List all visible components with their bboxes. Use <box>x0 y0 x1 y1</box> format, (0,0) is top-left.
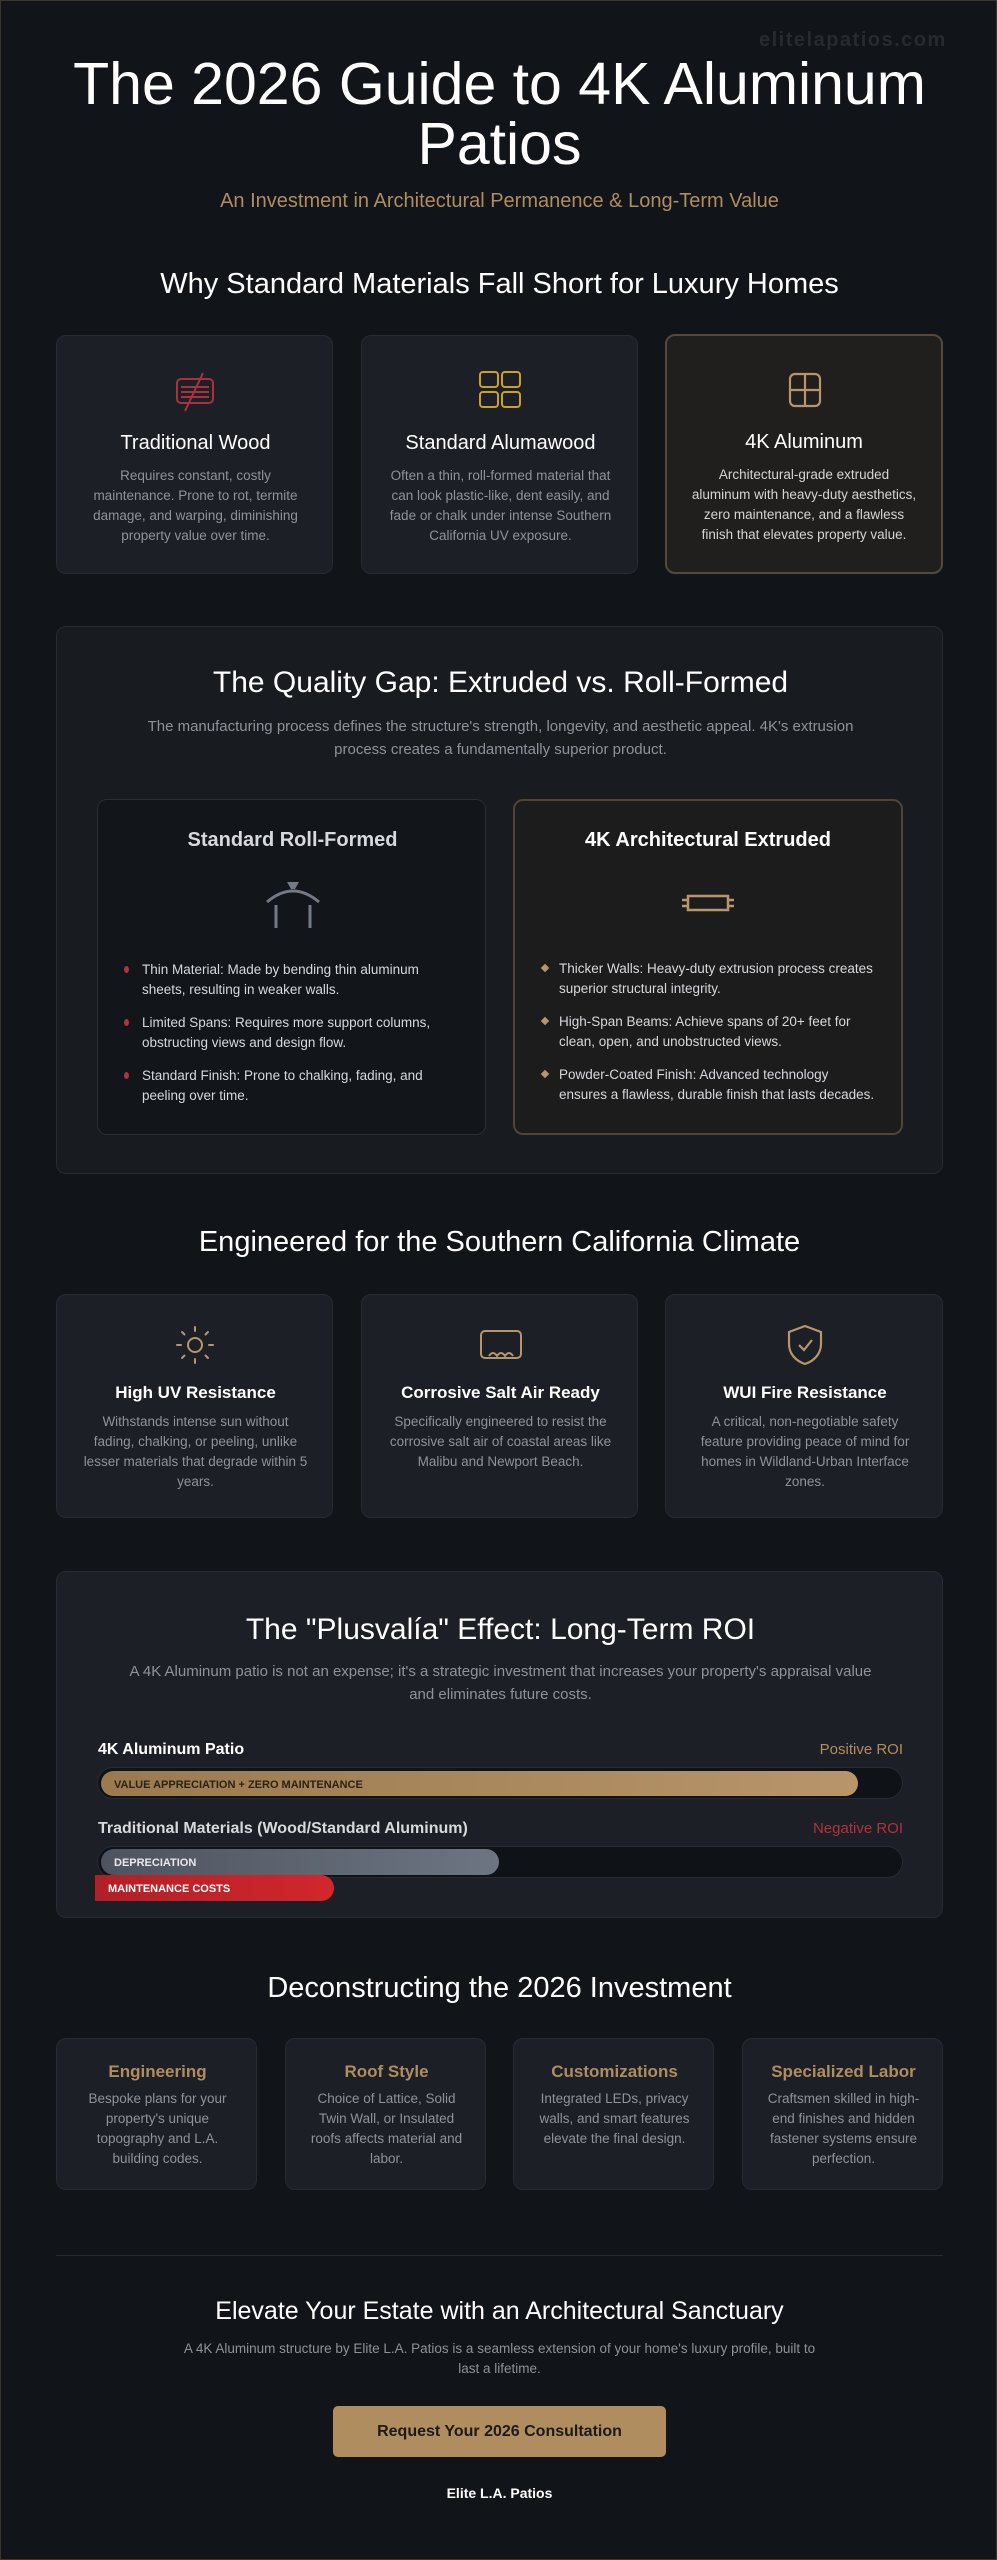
panel: 4K aluminum <box>665 334 943 574</box>
icon: sun <box>176 1326 214 1364</box>
panel: standard alumawood <box>361 335 638 574</box>
title: The 2026 Guide to 4K Aluminum <box>73 51 926 117</box>
subpanel title: Standard Roll-Formed <box>187 829 398 851</box>
watermark: elitelapatios.com <box>759 29 947 51</box>
title <box>73 51 926 177</box>
bullet list <box>124 962 430 1103</box>
card title: 4K Aluminum <box>745 431 863 453</box>
text: Integrated LEDs, privacy walls, and smart features elevate the final design. <box>539 2091 690 2146</box>
panel: fire <box>665 1294 943 1518</box>
label: 4K Aluminum Patio <box>98 1741 244 1758</box>
tag: Negative ROI <box>813 1820 903 1837</box>
text: Craftsmen skilled in high-end finishes and hidden fastener systems ensure perfection. <box>768 2091 919 2166</box>
icon: extruded beam <box>682 894 734 912</box>
card text: Withstands intense sun without fading, chalking, or peeling, unlike lesser materials that degrade within 5 years. <box>84 1414 307 1489</box>
bar row: 4K <box>97 1741 903 1799</box>
intro text: A 4K Aluminum patio is not an expense; it's a strategic investment that increases your property's appraisal value and eliminates future costs. <box>130 1663 871 1703</box>
card text: Architectural-grade extruded aluminum with heavy-duty aesthetics, zero maintenance, and a flawless finish that elevates property value. <box>692 467 916 542</box>
card title: High UV Resistance <box>115 1383 276 1402</box>
text: Bespoke plans for your property's unique topography and L.A. building codes. <box>88 2091 227 2166</box>
CTA text: A 4K Aluminum structure by Elite L.A. Patios is a seamless extension of your home's luxury profile, built to last a lifetime. <box>184 2341 815 2376</box>
bullet list: Powder-Coated Finish: Advanced technology ensures a flawless, durable finish that lasts decades. <box>559 1067 874 1102</box>
icon: roll-formed <box>266 882 320 928</box>
panel: salt air <box>361 1294 638 1518</box>
heading: why standard materials: Why Standard Materials Fall Short for Luxury Homes <box>160 268 839 300</box>
tag: Positive ROI <box>820 1741 903 1758</box>
icon: grid <box>479 371 521 408</box>
heading: investment: Deconstructing the 2026 Investment <box>267 1972 732 2004</box>
heading: The "Plusvalía" Effect: Long-Term ROI <box>246 1613 755 1646</box>
card title: Traditional Wood <box>120 432 271 454</box>
title: Customizations <box>551 2062 678 2081</box>
icon: window <box>788 372 822 408</box>
subpanel: roll-formed <box>97 799 486 1135</box>
maintenance bar <box>95 1875 334 1901</box>
CTA button: Request Your 2026 Consultation <box>377 2423 622 2440</box>
panel: traditional wood <box>56 335 333 574</box>
panel: roof style <box>285 2038 486 2190</box>
bar <box>97 1767 903 1799</box>
CTA heading: Elevate Your Estate with an Architectural Sanctuary <box>215 2297 784 2325</box>
subpanel: extruded <box>513 799 903 1135</box>
CTA button <box>333 2406 666 2457</box>
bar: DEPRECIATION <box>114 1857 196 1869</box>
card text: Specifically engineered to resist the corrosive salt air of coastal areas like Malibu and Newport Beach. <box>390 1414 611 1469</box>
title: Patios <box>418 111 581 177</box>
heading: climate: Engineered for the Southern California Climate <box>199 1226 800 1258</box>
panel: specialized labor <box>742 2038 943 2190</box>
bullet list <box>540 961 874 1102</box>
bar: VALUE APPRECIATION + ZERO MAINTENANCE <box>114 1779 363 1791</box>
title: Roof Style <box>344 2062 429 2081</box>
subtitle: An Investment in Architectural Permanence & Long-Term Value <box>220 190 779 212</box>
panel: ROI <box>56 1571 943 1918</box>
bullet list: Standard Finish: Prone to chalking, fading, and peeling over time. <box>142 1068 423 1103</box>
icon: shield <box>788 1324 822 1366</box>
label: Traditional Materials (Wood/Standard Aluminum) <box>98 1820 468 1837</box>
heading: The Quality Gap: Extruded vs. Roll-Formed <box>213 666 788 699</box>
card title: WUI Fire Resistance <box>723 1383 887 1402</box>
bullet list: High-Span Beams: Achieve spans of 20+ feet for clean, open, and unobstructed views. <box>559 1014 851 1049</box>
intro text: The manufacturing process defines the structure's strength, longevity, and aesthetic appeal. 4K's extrusion process creates a fundamentally superior product. <box>148 718 853 758</box>
subpanel title: 4K Architectural Extruded <box>585 829 831 851</box>
card title: Corrosive Salt Air Ready <box>401 1383 600 1402</box>
bar row: traditional <box>95 1820 903 1901</box>
footer brand: Elite L.A. Patios <box>447 2485 552 2501</box>
icon: wood <box>176 372 214 412</box>
bullet list: Thin Material: Made by bending thin aluminum sheets, resulting in weaker walls. <box>142 962 419 997</box>
card text: A critical, non-negotiable safety feature providing peace of mind for homes in Wildland-Urban Interface zones. <box>701 1414 909 1489</box>
panel: customizations <box>513 2038 714 2190</box>
text: Choice of Lattice, Solid Twin Wall, or Insulated roofs affects material and labor. <box>311 2091 462 2166</box>
icon: coastal <box>480 1330 522 1359</box>
panel: UV <box>56 1294 333 1518</box>
bullet list: Limited Spans: Requires more support columns, obstructing views and design flow. <box>142 1015 430 1050</box>
bullet list: Thicker Walls: Heavy-duty extrusion process creates superior structural integrity. <box>559 961 873 996</box>
panel: engineering <box>56 2038 257 2190</box>
maintenance bar: MAINTENANCE COSTS <box>108 1883 230 1895</box>
card text: Requires constant, costly maintenance. Prone to rot, termite damage, and warping, diminishing property value over time. <box>93 468 298 543</box>
title: Specialized Labor <box>771 2062 916 2081</box>
bar <box>97 1846 903 1878</box>
card text: Often a thin, roll-formed material that can look plastic-like, dent easily, and fade or chalk under intense Southern California UV exposure. <box>390 468 611 543</box>
title: Engineering <box>108 2062 207 2081</box>
panel: quality gap <box>56 626 943 1174</box>
card title: Standard Alumawood <box>405 432 596 454</box>
